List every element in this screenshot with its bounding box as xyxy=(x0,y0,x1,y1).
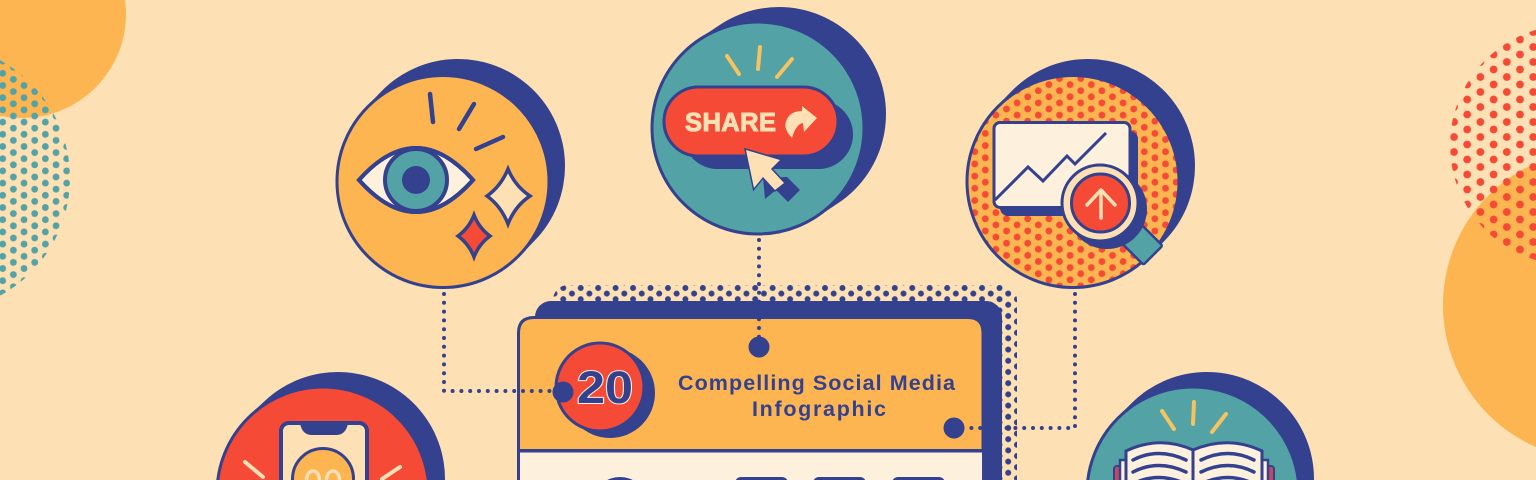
card body xyxy=(520,452,982,480)
card node right xyxy=(944,418,964,438)
card shadow xyxy=(535,301,1002,480)
icon: eye and sparkles xyxy=(337,76,549,288)
connector: chart to card xyxy=(958,294,1075,428)
decoration: top-left orange circle and teal halftone xyxy=(0,0,126,312)
dotted halftone behind main card xyxy=(553,285,1017,480)
card header xyxy=(518,318,983,480)
connector: share to card xyxy=(757,240,761,342)
icon: open book xyxy=(1087,387,1299,480)
card title xyxy=(678,371,956,421)
card title: Infographic xyxy=(752,397,886,421)
icon: phone with face xyxy=(217,387,429,480)
card body shapes xyxy=(596,477,945,480)
icon: share button: SHARE xyxy=(685,109,776,137)
card title: Compelling Social Media xyxy=(678,371,956,395)
number badge xyxy=(556,343,655,438)
connector: eye to number badge xyxy=(444,294,560,391)
number badge: 20 xyxy=(577,362,633,413)
icon: growth chart and magnifier xyxy=(967,76,1179,288)
icon: share button xyxy=(652,22,864,234)
card node left xyxy=(552,382,574,402)
main card xyxy=(518,301,1002,480)
card node top xyxy=(748,336,770,358)
decoration: right orange circle and red halftone xyxy=(1443,25,1536,460)
